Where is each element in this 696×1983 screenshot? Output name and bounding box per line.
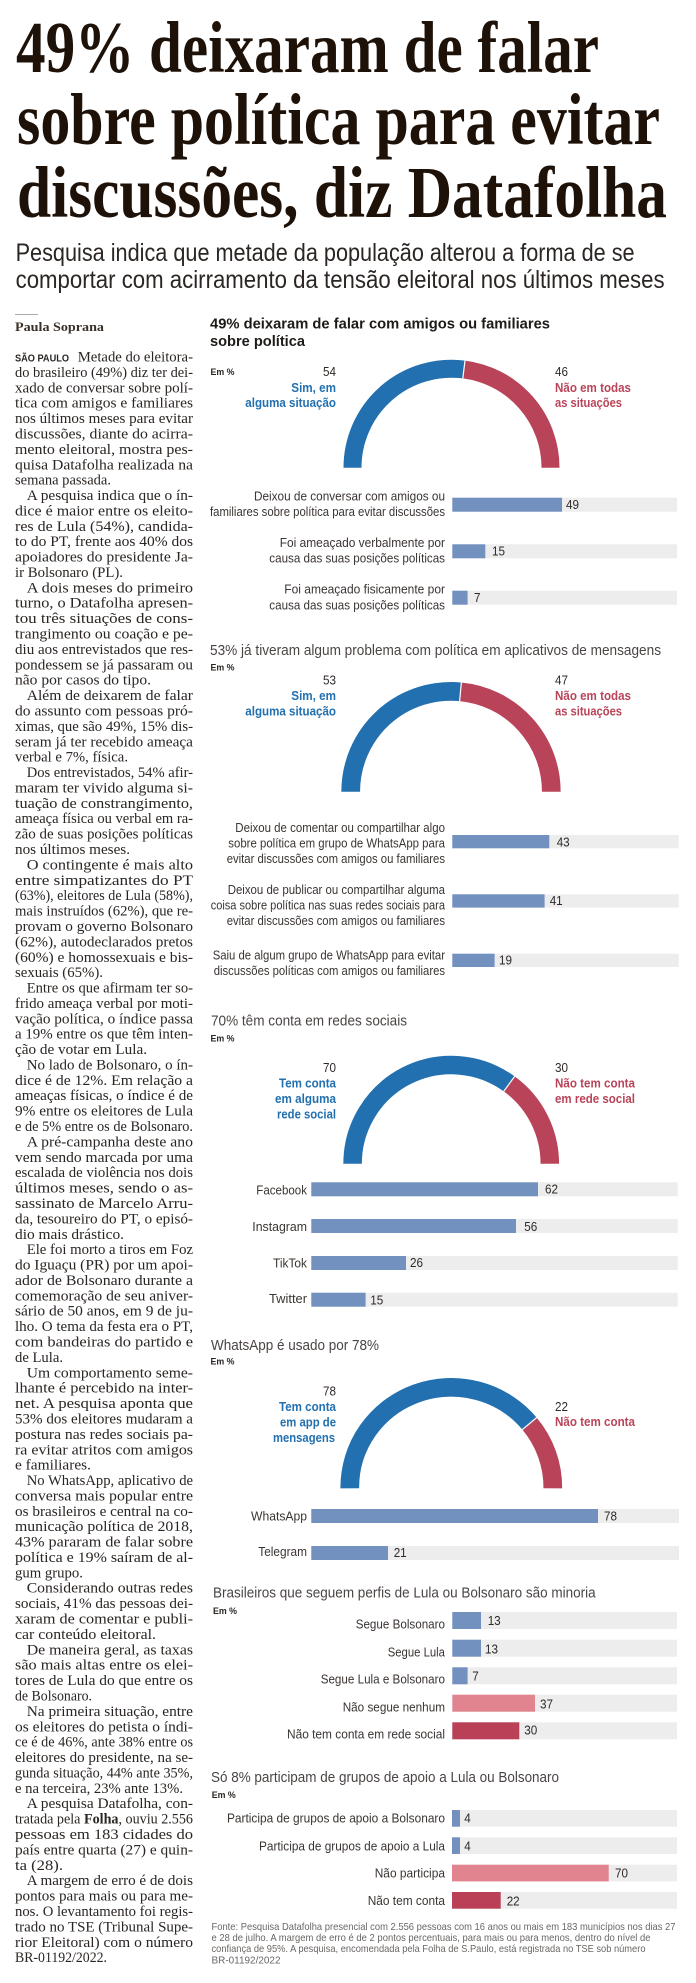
article text column: car conteúdo eleitoral. (15, 1627, 156, 1643)
article text column: to do PT, frente aos 40% dos (15, 534, 193, 550)
article text column: diu aos entrevistados que res- (15, 642, 193, 658)
bar: TikTok (273, 1256, 678, 1270)
panel: chart 1, deixaram de falar (210, 316, 677, 612)
article text column: Considerando outras redes (27, 1581, 193, 1597)
label: tem conta (273, 1385, 337, 1445)
heading: Só 8% participam de grupos de apoio a Lula ou Bolsonaro (211, 1769, 559, 1786)
subtitle (16, 239, 665, 294)
bar: Não participa: Não participa (375, 1867, 445, 1881)
article text column: A pesquisa indica que o ín- (27, 488, 193, 504)
article text column: nos últimos meses para evitar (15, 411, 193, 427)
unit note: Em % (210, 1356, 235, 1367)
article text column: A margem de erro é de dois (27, 1873, 193, 1889)
panel: chart 5, seguem perfis (213, 1584, 677, 1741)
article text column: conversa mais popular entre (15, 1488, 193, 1504)
bar: Não tem conta em rede social: 30 (524, 1724, 537, 1738)
article text column: últimos meses, sendo o as- (15, 1181, 193, 1197)
source note: confiança de 95%. A pesquisa, encomendada pela Folha de S.Paulo, está registrada no TSE sob número (212, 1943, 646, 1955)
label: tem conta: rede social (277, 1107, 336, 1121)
label: sim: 54 (323, 365, 336, 379)
label: não tem conta: 22 (555, 1400, 568, 1414)
article text column: escalada de violência nos dois (15, 1165, 193, 1181)
semicircle chart (351, 682, 551, 792)
bar: Twitter: 15 (370, 1294, 383, 1308)
article text column: net. A pesquisa aponta que (15, 1396, 193, 1412)
bar: Facebook: 62 (545, 1183, 558, 1197)
bar: apoio a Lula: 4 (464, 1840, 471, 1854)
label: tem conta: Tem conta (279, 1076, 337, 1090)
label: não (555, 674, 631, 719)
article text column: trado no TSE (Tribunal Supe- (15, 1919, 193, 1935)
article text column: tica com amigos e familiares (15, 396, 193, 412)
article text column: são mais altas entre os elei- (15, 1658, 193, 1674)
article text column: 9% entre os eleitores de Lula (15, 1104, 193, 1120)
article text column: De maneira geral, as taxas (27, 1642, 193, 1658)
article text column: do assunto com pessoas pró- (15, 704, 193, 720)
bar: Segue Lula: 13 (485, 1643, 498, 1657)
label: não: as situações (555, 396, 622, 410)
article text column: municação política de 2018, (15, 1519, 193, 1535)
label: não tem conta: Não tem conta (555, 1076, 636, 1090)
article text column: vação política, o índice passa (15, 1011, 193, 1027)
article text column: com bandeiras do partido e (15, 1335, 193, 1350)
article text column: verbal e 7%, física. (15, 750, 128, 766)
article text column (15, 350, 194, 1966)
label: sim (245, 674, 336, 719)
label: sim: 53 (323, 674, 336, 688)
article text column: mento eleitoral, mostra pes- (15, 442, 193, 458)
article text column: ção de votar em Lula. (15, 1042, 147, 1058)
article text column: semana passada. (15, 473, 111, 489)
heading: 53% já tiveram algum problema com política em aplicativos de mensagens (210, 642, 661, 659)
label: tem conta: em app de (280, 1416, 336, 1430)
bar: ameaça física: 7 (474, 591, 481, 605)
article text column: rior Eleitoral) com o número (15, 1935, 193, 1951)
heading: 70% têm conta em redes sociais (211, 1012, 407, 1029)
bar: Não segue nenhum: Não segue nenhum (343, 1700, 445, 1714)
bar: ameaça verbal (269, 536, 677, 566)
article text column: res de Lula (54%), candida- (15, 519, 193, 535)
bar: Telegram (258, 1545, 679, 1560)
bar: Telegram: 21 (394, 1546, 407, 1560)
label: tem conta: mensagens (273, 1431, 335, 1445)
article text column: Metade do eleitora- (78, 350, 193, 365)
article text column: tuação de constrangimento, (15, 796, 193, 812)
label: não tem conta: 30 (555, 1061, 568, 1075)
article text column: sociais, 41% das pessoas dei- (15, 1596, 193, 1612)
article text column: entre simpatizantes do PT (15, 873, 193, 889)
heading (210, 316, 550, 350)
bar: Facebook (256, 1182, 678, 1197)
article text column: ta (28). (15, 1858, 63, 1874)
bar: Não participa (375, 1865, 677, 1881)
bar: Segue Lula: Segue Lula (388, 1645, 445, 1659)
source note: e 28 de julho. A margem de erro é de 2 pontos percentuais, para mais ou para menos, dentro do nível de (212, 1932, 651, 1944)
article text column: eleitores do presidente, na se- (15, 1750, 193, 1766)
article text column: de Bolsonaro. (15, 1689, 92, 1705)
unit note: Em % (212, 1790, 236, 1801)
bar: ameaça verbal: 15 (492, 544, 505, 558)
bar: comentar em grupo: Deixou de comentar ou compartilhar algo (235, 821, 445, 835)
article text column: comemoração de seu aniver- (15, 1288, 193, 1304)
label: tem conta: 78 (323, 1385, 336, 1399)
article text column: ximas, que são 49%, 15% dis- (15, 719, 193, 735)
bar: Segue Bolsonaro (356, 1612, 677, 1631)
article text column: SÃO PAULO (15, 354, 69, 364)
article text column: mais instruídos (62%), que re- (15, 904, 193, 920)
label: não tem conta (555, 1400, 636, 1429)
bar: conversar: 49 (566, 498, 579, 512)
article text column: pontos para mais ou para me- (15, 1889, 193, 1905)
bar: publicar em redes: coisa sobre política nas suas redes sociais para (211, 899, 445, 913)
label: tem conta (275, 1061, 337, 1121)
heading: Brasileiros que seguem perfis de Lula ou Bolsonaro são minoria (213, 1584, 596, 1601)
bar: Segue Lula (388, 1640, 677, 1659)
byline (15, 314, 105, 334)
article text column: os eleitores do petista o índi- (15, 1719, 193, 1735)
article text column: ador de Bolsonaro durante a (15, 1273, 193, 1289)
article text column: (60%) e homossexuais e bis- (15, 950, 193, 966)
bar: apoio a Bolsonaro: 4 (464, 1812, 471, 1826)
bar: WhatsApp (251, 1509, 679, 1524)
article text column: ra evitar atritos com amigos (15, 1442, 193, 1458)
article text column: xado de conversar sobre polí- (15, 380, 193, 396)
bar: Instagram (252, 1219, 678, 1234)
bar: ameaça verbal: causa das suas posições políticas (269, 552, 445, 566)
article text column: 43% pararam de falar sobre (15, 1535, 193, 1551)
bar: Segue Lula e Bolsonaro: 7 (472, 1670, 479, 1684)
article text column: dio mais drástico. (15, 1227, 124, 1243)
bar: Twitter: Twitter (269, 1292, 307, 1306)
panel: chart 6, grupos de apoio (211, 1769, 677, 1909)
article text column: No lado de Bolsonaro, o ín- (27, 1058, 193, 1073)
article text column: sexuais (65%). (15, 965, 103, 981)
bar: Telegram: Telegram (258, 1545, 307, 1559)
bar: Não tem conta: 22 (507, 1895, 520, 1909)
bar: saiu de grupo: 19 (499, 954, 512, 968)
bar: Não tem conta: Não tem conta (368, 1894, 445, 1908)
bar: comentar em grupo: evitar discussões com amigos ou familiares (227, 852, 445, 866)
bar: apoio a Bolsonaro (227, 1810, 677, 1827)
byline: Paula Soprana (15, 319, 105, 334)
bar: Facebook: Facebook (256, 1183, 308, 1197)
article text column: maram ter vivido alguma si- (15, 780, 193, 796)
article text column: A pesquisa Datafolha, con- (27, 1796, 193, 1812)
source note (212, 1921, 676, 1966)
bar: saiu de grupo: Saiu de algum grupo de WhatsApp para evitar (213, 948, 445, 962)
bar: publicar em redes: Deixou de publicar ou compartilhar alguma (228, 883, 445, 897)
unit note: Em % (210, 1034, 235, 1045)
label: não tem conta: Não tem conta (555, 1415, 636, 1429)
article text column: 53% dos eleitores mudaram a (15, 1412, 193, 1427)
label: tem conta: Tem conta (279, 1400, 337, 1414)
article text column: provam o governo Bolsonaro (15, 919, 193, 935)
article text column: seram já ter recebido ameaça (15, 734, 193, 750)
bar: comentar em grupo: 43 (557, 836, 570, 850)
article text column: não por casos do tipo. (15, 673, 151, 689)
semicircle chart (350, 1387, 553, 1488)
article text column: Na primeira situação, entre (27, 1704, 193, 1720)
bar: publicar em redes (211, 883, 679, 928)
bar: TikTok: TikTok (273, 1256, 308, 1270)
title (16, 7, 667, 233)
article text column: país entre quarta (27) e quin- (15, 1842, 193, 1858)
unit note: Em % (210, 367, 235, 378)
label: não (555, 365, 631, 410)
semicircle chart (353, 1065, 550, 1164)
article text column: pondessem se já passaram ou (15, 657, 194, 673)
label: sim: Sim, em (291, 381, 336, 395)
bar: ameaça física: Foi ameaçado fisicamente por (284, 583, 445, 597)
bar: WhatsApp: WhatsApp (251, 1510, 307, 1524)
label: não tem conta (555, 1061, 636, 1106)
article text column: de Lula. (15, 1350, 63, 1366)
bar: Instagram: 56 (524, 1220, 537, 1234)
heading: 49% deixaram de falar com amigos ou familiares (210, 316, 550, 332)
article text column: do Iguaçu (PR) por um apoi- (15, 1258, 193, 1274)
article text column: turno, o Datafolha apresen- (15, 596, 193, 612)
source note: BR-01192/2022 (212, 1954, 281, 1966)
label: não: 46 (555, 365, 568, 379)
article text column: ce é de 46%, ante 38% entre os (15, 1735, 193, 1751)
article text column: pessoas em 183 cidades do (15, 1827, 193, 1843)
article text column: e familiares. (15, 1458, 91, 1474)
label: não tem conta: em rede social (555, 1092, 635, 1106)
article text column: Entre os que afirmam ter so- (27, 981, 193, 997)
bar: comentar em grupo: sobre política em grupo de WhatsApp para (228, 837, 445, 851)
bar: Segue Bolsonaro: 13 (488, 1614, 501, 1628)
bar: WhatsApp: 78 (604, 1510, 617, 1524)
article text column: gunda situação, 44% ante 35%, (15, 1765, 193, 1781)
article text column: nos últimos meses. (15, 842, 130, 858)
article text column: tratada pela Folha, ouviu 2.556 (15, 1812, 194, 1828)
article text column: Dos entrevistados, 54% afir- (27, 765, 193, 781)
label: sim: alguma situação (245, 705, 336, 719)
article text column: e de 5% entre os de Bolsonaro. (15, 1119, 193, 1135)
bar: Segue Bolsonaro: Segue Bolsonaro (356, 1617, 445, 1631)
article text column: política e 19% saíram de al- (15, 1550, 193, 1566)
article text column: lhante é percebido na inter- (15, 1381, 193, 1397)
label: não: as situações (555, 705, 622, 719)
article text column: O contingente é mais alto (27, 857, 193, 873)
bar: Segue Lula e Bolsonaro: Segue Lula e Bolsonaro (321, 1673, 445, 1687)
bar: Twitter (269, 1292, 678, 1308)
panel: chart 3, redes sociais (210, 1012, 678, 1308)
article text column: da, tesoureiro do PT, o episó- (15, 1211, 193, 1227)
article text column: quisa Datafolha realizada na (15, 457, 193, 473)
bar: Não segue nenhum (343, 1695, 677, 1714)
article text column: gum grupo. (15, 1565, 83, 1581)
bar: conversar: familiares sobre política para evitar discussões (210, 505, 445, 519)
unit note: Em % (213, 1606, 238, 1617)
bar: publicar em redes: evitar discussões com amigos ou familiares (227, 914, 445, 928)
panel: chart 4, WhatsApp (210, 1337, 679, 1560)
semicircle chart (352, 361, 550, 468)
article text column: frido ameaça verbal por moti- (15, 996, 193, 1012)
bar: TikTok: 26 (410, 1256, 423, 1270)
bar: Não segue nenhum: 37 (540, 1697, 553, 1711)
article text column: tores de Lula do que entre os (15, 1673, 193, 1689)
article text column: e na terceira, 23% ante 13%. (15, 1781, 183, 1797)
article text column: zão de suas posições políticas (15, 827, 193, 843)
article text column: Além de deixarem de falar (27, 688, 193, 704)
bar: conversar: Deixou de conversar com amigos ou (254, 490, 445, 504)
article text column: nos. O levantamento foi regis- (15, 1904, 193, 1920)
label: não: Não em todas (555, 381, 631, 395)
article text column: A dois meses do primeiro (27, 580, 193, 596)
label: sim: alguma situação (245, 396, 336, 410)
article text column: a 19% entre os que têm inten- (15, 1027, 193, 1043)
article text column: No WhatsApp, aplicativo de (27, 1473, 193, 1489)
bar: ameaça física: causa das suas posições políticas (269, 598, 445, 612)
label: sim (245, 365, 336, 410)
article text column: sário de 50 anos, em 9 de ju- (15, 1304, 193, 1320)
heading: WhatsApp é usado por 78% (211, 1337, 379, 1354)
bar: saiu de grupo (213, 948, 679, 978)
bar: conversar (210, 490, 677, 519)
article text column: tou três situações de cons- (15, 611, 193, 627)
label: não: Não em todas (555, 689, 631, 703)
heading: sobre política (210, 333, 306, 350)
article text column: apoiadores do presidente Ja- (15, 550, 193, 566)
article text column: xaram de comentar e publi- (15, 1612, 193, 1627)
bar: comentar em grupo (227, 821, 679, 866)
bar: apoio a Bolsonaro: Participa de grupos de apoio a Bolsonaro (227, 1811, 445, 1825)
bar: Não participa: 70 (615, 1867, 628, 1881)
bar: publicar em redes: 41 (550, 894, 563, 908)
article text column: Um comportamento seme- (27, 1365, 193, 1381)
article text column: ameaças físicas, o índice é de (15, 1088, 193, 1104)
article text column: discussões, diante do acirra- (15, 427, 193, 442)
article text column: postura nas redes sociais pa- (15, 1427, 193, 1443)
article text column: (62%), autodeclarados pretos (15, 934, 193, 950)
bar: apoio a Lula (259, 1837, 677, 1854)
label: tem conta: em alguma (275, 1092, 337, 1106)
article text column: ameaça física ou verbal em ra- (15, 811, 193, 827)
article text column: sassinato de Marcelo Arru- (15, 1196, 193, 1212)
article text column: BR-01192/2022. (15, 1950, 107, 1966)
article text column: lho. O tema da festa era o PT, (15, 1319, 193, 1335)
article text column: dice é de 12%. Em relação a (15, 1073, 193, 1089)
bar: ameaça verbal: Foi ameaçado verbalmente por (280, 536, 445, 550)
label: sim: Sim, em (291, 689, 336, 703)
article text column: vem sendo marcada por uma (15, 1150, 193, 1166)
bar: Não tem conta em rede social: Não tem conta em rede social (287, 1727, 445, 1741)
bar: ameaça física (269, 583, 677, 612)
bar: Instagram: Instagram (252, 1220, 307, 1234)
bar: saiu de grupo: discussões políticas com amigos ou familiares (214, 964, 445, 978)
bar: Não tem conta (368, 1892, 677, 1909)
bar: apoio a Lula: Participa de grupos de apoio a Lula (259, 1839, 445, 1853)
unit note: Em % (210, 663, 235, 674)
label: não: 47 (555, 674, 568, 688)
label: tem conta: 70 (323, 1061, 336, 1075)
article text column: trangimento ou coação e pe- (15, 627, 193, 642)
article text column: A pré-campanha deste ano (27, 1135, 193, 1150)
article text column: os brasileiros e central na co- (15, 1504, 193, 1520)
bar: Segue Lula e Bolsonaro (321, 1667, 677, 1687)
article text column: Ele foi morto a tiros em Foz (27, 1242, 193, 1258)
article text column: ir Bolsonaro (PL). (15, 565, 123, 581)
panel: chart 2, aplicativos de mensagens (210, 642, 679, 978)
bar: Não tem conta em rede social (287, 1722, 677, 1741)
article text column: (63%), eleitores de Lula (58%), (15, 888, 193, 904)
article text column: do brasileiro (49%) diz ter dei- (15, 365, 193, 381)
article text column: dice é maior entre os eleito- (15, 503, 193, 519)
